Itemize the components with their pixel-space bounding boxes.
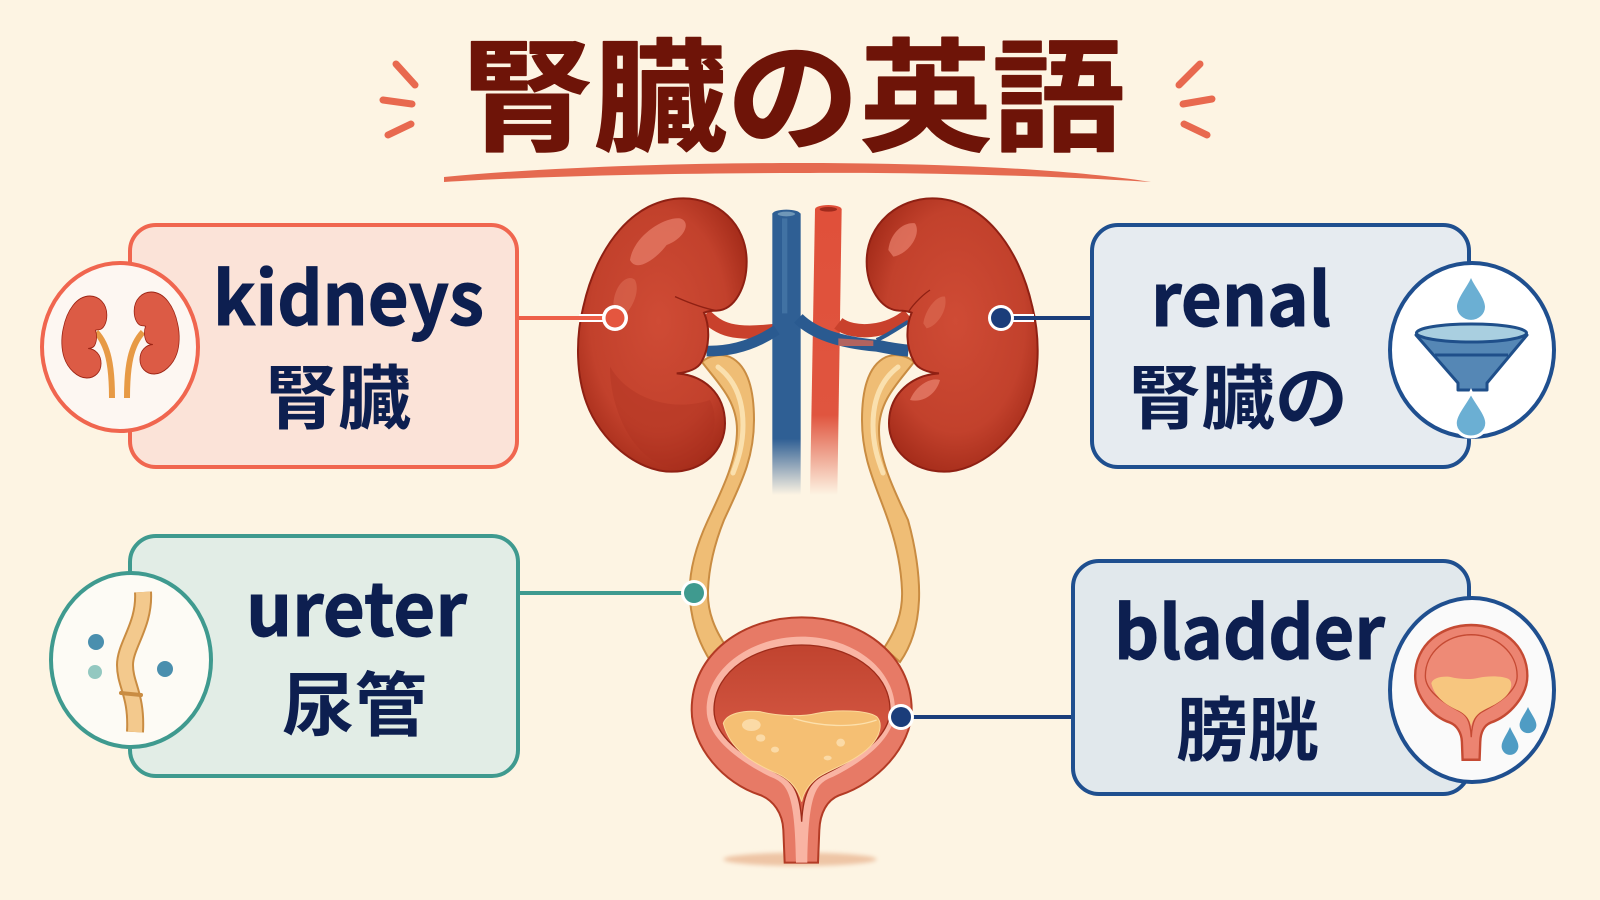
title: 腎臓の英語 <box>461 0 1125 177</box>
renal veins <box>707 318 908 351</box>
urine <box>723 711 880 802</box>
term: kidneys: kidneys <box>213 241 484 347</box>
translation: 腎臓 <box>265 343 411 444</box>
panel: kidneys <box>42 225 517 467</box>
connector dots <box>602 305 1014 730</box>
term: renal: renal <box>1151 242 1331 348</box>
icon: kidneys <box>42 263 198 431</box>
ureter: right <box>862 355 919 662</box>
bladder <box>692 617 912 866</box>
aorta <box>810 205 842 495</box>
sparks: right <box>1179 64 1212 135</box>
icon: bladder with drops <box>1390 598 1554 782</box>
icon: funnel with drops <box>1390 263 1554 437</box>
renal arteries <box>705 315 908 332</box>
term: bladder: bladder <box>1114 575 1385 681</box>
translation: 尿管 <box>282 650 427 751</box>
artery highlight <box>838 338 873 346</box>
icon: ureter tube <box>51 573 211 747</box>
panel: renal <box>1092 225 1554 467</box>
right kidney <box>867 198 1038 472</box>
panel: bladder <box>1073 561 1554 794</box>
kidneys and vessels <box>578 198 1038 495</box>
term: ureter: ureter <box>246 552 467 658</box>
translation: 膀胱 <box>1176 675 1319 776</box>
ureter: left <box>690 355 754 662</box>
sparks: left <box>383 64 415 135</box>
connector lines <box>518 318 1092 717</box>
title underline <box>444 163 1151 182</box>
panel: ureter <box>51 536 518 776</box>
left kidney <box>578 198 747 472</box>
vena cava <box>772 210 801 495</box>
translation: 腎臓の <box>1128 343 1348 444</box>
